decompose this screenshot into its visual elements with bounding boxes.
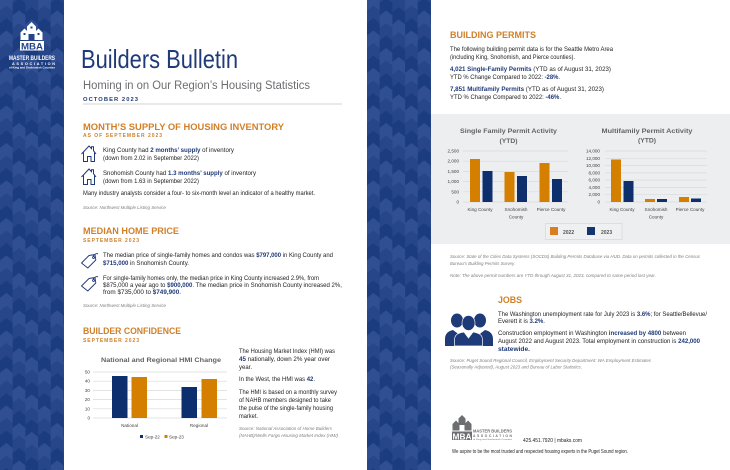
source: permit data: Bureau’s Building Permits Survey. bbox=[450, 261, 515, 266]
text: unemployment: Everett it is 3.2%. bbox=[498, 319, 545, 325]
bar chart: multifamily permits: 10,000 bbox=[586, 163, 600, 168]
heading: housing inventory: MONTH’S SUPPLY OF HOUSING INVENTORY bbox=[83, 122, 285, 133]
panel: median home price bbox=[82, 226, 342, 308]
chart title: Multifamily Permit Activity bbox=[602, 128, 693, 135]
bar chart: single family permits: King County bbox=[467, 207, 493, 212]
date: OCTOBER 2023 bbox=[83, 97, 139, 103]
source: Source: Northwest Multiple Listing Service bbox=[83, 303, 166, 308]
text: analyst note: Many industry analysts consider a four- to six-month level an indicator of a healthy market. bbox=[83, 191, 315, 197]
bar chart: single family permits: 500 bbox=[451, 189, 459, 194]
bar chart: single family permits: 2,000 bbox=[448, 159, 459, 164]
bar chart: HMI change: Regional bbox=[190, 423, 208, 428]
text: HMI description: market. bbox=[239, 414, 258, 420]
bar chart: HMI change: National bbox=[121, 423, 138, 428]
bar chart: single family permits: 1,500 bbox=[448, 169, 459, 174]
text: single-family median price: For single-family homes only, the median price in King County increased 2.9%, from bbox=[103, 276, 319, 282]
legend: permit charts bbox=[546, 224, 622, 240]
logo: footer Master Builders Association (grey): ASSOCIATION bbox=[473, 434, 513, 438]
bar chart: single family permits: 0 bbox=[456, 200, 459, 204]
text: construction employment: statewide. bbox=[498, 347, 530, 353]
heading: building permits: BUILDING PERMITS bbox=[450, 30, 536, 41]
source bbox=[239, 426, 338, 438]
legend: permit charts: 2022 bbox=[563, 230, 574, 236]
bar chart: multifamily permits: Pierce County bbox=[676, 207, 705, 212]
logo: footer Master Builders Association (grey): MBA bbox=[452, 431, 472, 441]
bar chart: HMI change bbox=[85, 357, 227, 440]
bar chart: single family permits bbox=[448, 128, 568, 220]
bar chart: multifamily permits: 2,000 bbox=[588, 192, 600, 197]
logo: Master Builders Association (white): MBA bbox=[21, 42, 43, 53]
text: HMI description bbox=[239, 349, 337, 420]
panel: housing inventory bbox=[82, 122, 315, 210]
bar chart: single family permits: 2,500 bbox=[448, 148, 459, 154]
bar chart: HMI change: 10 bbox=[85, 406, 90, 411]
text: multifamily permits: 7,851 Multifamily Permits (YTD as of August 31, 2023) bbox=[450, 87, 604, 93]
panel: builder confidence bbox=[83, 326, 338, 440]
bar chart: multifamily permits: 14,000 bbox=[586, 148, 600, 154]
panel: jobs bbox=[445, 295, 707, 370]
text: unemployment bbox=[498, 312, 707, 325]
date: september: SEPTEMBER 2023 bbox=[83, 238, 139, 244]
bar chart: HMI change: Sep-23 bbox=[169, 434, 184, 440]
bar chart: HMI change: 0 bbox=[87, 416, 90, 420]
text: construction employment: Construction employment in Washington increased by 4800 between bbox=[498, 331, 686, 337]
text: construction employment bbox=[498, 331, 701, 353]
bar chart: single family permits: 1,000 bbox=[448, 179, 459, 184]
title: Builders Bulletin bbox=[81, 44, 238, 74]
text: tagline: We aspire to be the most trusted and respected housing experts in the Puget Sound region. bbox=[452, 449, 628, 455]
text: permits intro: The following building permit data is for the Seattle Metro Area bbox=[450, 47, 614, 53]
bar chart: multifamily permits: 6,000 bbox=[588, 178, 600, 183]
date: september: SEPTEMBER 2023 bbox=[83, 338, 139, 344]
text: HMI description: 45 nationally, down 2% year over bbox=[239, 357, 330, 363]
text: single-family permits: YTD % Change Compared to 2022: -28%. bbox=[450, 75, 560, 81]
bar chart: HMI change: Sep-22 bbox=[145, 434, 160, 440]
source: jobs: (Seasonally Adjusted), August 2023 and Bureau of Labor Statistics. bbox=[450, 364, 582, 370]
source: Source: National Association of Home Builders bbox=[239, 426, 333, 431]
centre chevron sidebar bbox=[367, 0, 431, 470]
text: HMI description: the pulse of the single-family housing bbox=[239, 406, 333, 412]
logo: Master Builders Association (white) bbox=[9, 22, 56, 70]
source: permit data bbox=[450, 254, 701, 278]
text: HMI description: of NAHB members designed to take bbox=[239, 398, 332, 404]
source: Source: Northwest Multiple Listing Service bbox=[83, 205, 166, 210]
bar chart: single family permits: Snohomish bbox=[505, 207, 528, 212]
panel: permit charts background bbox=[431, 114, 730, 244]
bar chart: HMI change: 50 bbox=[85, 370, 90, 374]
bar chart: multifamily permits: (YTD) bbox=[638, 138, 656, 144]
text: single-family permits bbox=[450, 67, 611, 81]
bar chart: multifamily permits: 12,000 bbox=[586, 156, 600, 161]
panel: housing inventory: (down from 2.02 in September 2022) bbox=[103, 156, 199, 162]
text: HMI description: year. bbox=[239, 365, 252, 371]
logo: Master Builders Association (white): of King and Snohomish Counties bbox=[9, 66, 56, 70]
text: construction employment: August 2022 and August 2023. Total employment in construction is 242,000 bbox=[498, 339, 701, 345]
bar chart: multifamily permits: Snohomish bbox=[645, 207, 668, 212]
text: Snohomish County supply: Snohomish County had 1.3 months’ supply of inventory bbox=[103, 171, 256, 177]
source: permit data: Source: State of the Cities Data Systems (SOCDS) Building Permits Database via HUD. Data on permits collected in the Census bbox=[450, 254, 701, 259]
source: jobs bbox=[450, 358, 652, 370]
bar chart: single family permits: Pierce County bbox=[537, 207, 566, 212]
panel: median home price: $875,000 a year ago to $900,000. The median price in Snohomish County increased 2%, bbox=[103, 283, 342, 289]
text: median price: The median price of single-family homes and condos was $797,000 in King County and bbox=[103, 253, 333, 259]
bar chart: HMI change: 40 bbox=[85, 379, 90, 384]
panel: median home price: $715,000 in Snohomish County. bbox=[103, 261, 189, 267]
logo: footer Master Builders Association (grey): of King and Snohomish Counties bbox=[473, 438, 512, 441]
bar chart: multifamily permits: 0 bbox=[597, 200, 600, 204]
text: HMI description: The Housing Market Index (HMI) was bbox=[239, 349, 335, 355]
icon: house, Snohomish County bbox=[82, 169, 96, 184]
source: jobs: Source: Puget Sound Regional Council, Employment Security Department: WA Employment Estimates bbox=[450, 358, 652, 363]
icon: price tag 1 bbox=[82, 254, 98, 268]
text: permits intro bbox=[450, 47, 614, 61]
heading: jobs: JOBS bbox=[498, 295, 522, 306]
text: HMI description: In the West, the HMI was 42. bbox=[239, 377, 315, 383]
text: multifamily permits: YTD % Change Compared to 2022: -46%. bbox=[450, 95, 561, 101]
source: permit data: Note: The above permit numbers are YTD through August 31, 2023, compared to same period last year. bbox=[450, 273, 656, 278]
text: unemployment: The Washington unemployment rate for July 2023 is 3.6%; for Seattle/Bellevue/ bbox=[498, 312, 707, 318]
bar chart: single family permits: County bbox=[509, 214, 524, 220]
logo: footer Master Builders Association (grey) bbox=[452, 415, 513, 441]
text: contact: 425.451.7920 | mbaks.com bbox=[523, 438, 582, 444]
panel: housing inventory: (down from 1.63 in September 2022) bbox=[103, 179, 199, 185]
bar chart: multifamily permits: 8,000 bbox=[588, 170, 600, 175]
bar chart: multifamily permits: County bbox=[649, 214, 664, 220]
chart title: National and Regional HMI Change bbox=[101, 357, 221, 364]
icon: price tag 2 bbox=[82, 277, 98, 291]
heading: builder confidence: BUILDER CONFIDENCE bbox=[83, 326, 181, 337]
text: multifamily permits bbox=[450, 87, 604, 101]
icon: business people bbox=[445, 314, 493, 346]
date: as of september: AS OF SEPTEMBER 2023 bbox=[83, 133, 162, 139]
chart title: Single Family Permit Activity bbox=[460, 128, 557, 135]
logo: footer Master Builders Association (grey): MASTER BUILDERS bbox=[473, 428, 512, 434]
panel: building permits bbox=[450, 30, 614, 101]
icon: house, King County bbox=[82, 146, 96, 162]
bar chart: single family permits: (YTD) bbox=[499, 138, 518, 145]
text: HMI description: The HMI is based on a monthly survey bbox=[239, 390, 337, 396]
source: (NAHB)/Wells Fargo Housing Market Index (HMI) bbox=[239, 433, 338, 438]
panel: median home price: from $735,000 to $749,900. bbox=[103, 290, 181, 296]
bar chart: multifamily permits: 4,000 bbox=[588, 185, 600, 190]
subtitle: Homing in on Our Region’s Housing Statistics bbox=[83, 80, 310, 92]
logo: Master Builders Association (white): ASSOCIATION bbox=[12, 62, 55, 66]
bar chart: multifamily permits bbox=[586, 128, 707, 220]
bar chart: HMI change: 30 bbox=[85, 388, 90, 393]
text: King County supply: King County had 2 months’ supply of inventory bbox=[103, 148, 234, 154]
heading: median home price: MEDIAN HOME PRICE bbox=[83, 226, 179, 237]
left chevron sidebar bbox=[0, 0, 64, 470]
logo: Master Builders Association (white): MASTER BUILDERS bbox=[9, 56, 55, 62]
bar chart: multifamily permits: King County bbox=[609, 207, 635, 212]
legend: permit charts: 2023 bbox=[601, 230, 612, 236]
text: single-family permits: 4,021 Single-Family Permits (YTD as of August 31, 2023) bbox=[450, 67, 611, 73]
bar chart: HMI change: 20 bbox=[85, 397, 90, 402]
text: permits intro: (including King, Snohomish, and Pierce counties). bbox=[450, 55, 575, 61]
